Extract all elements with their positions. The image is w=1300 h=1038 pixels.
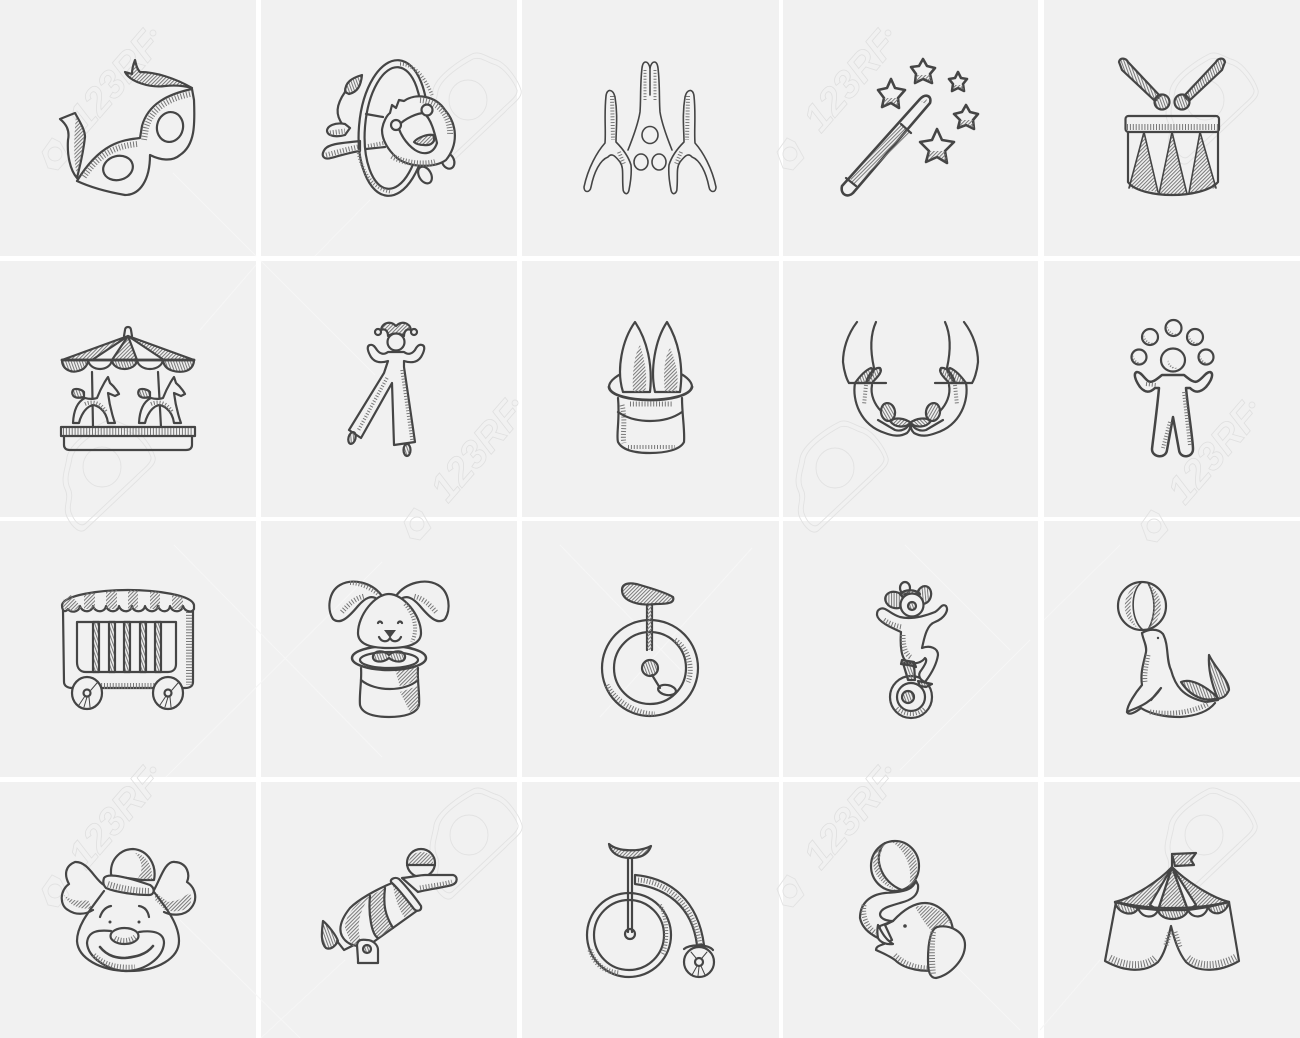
icon: aerial catchers xyxy=(843,322,978,436)
icon: jester on stilts xyxy=(347,323,424,456)
icon: magic wand with stars xyxy=(842,59,978,195)
icon: unicycle xyxy=(602,583,698,716)
icon: rabbit ears in top hat xyxy=(609,322,692,453)
icon: carnival mask xyxy=(60,60,194,195)
icon: penny farthing xyxy=(587,844,714,977)
icon: drum with sticks xyxy=(1119,59,1225,195)
icon: carousel xyxy=(61,327,195,450)
icon: clown on unicycle xyxy=(877,582,947,718)
icon: lion jumping through hoop xyxy=(323,57,457,199)
icon: juggler xyxy=(1132,320,1214,456)
icon: acrobats pyramid xyxy=(584,62,716,194)
icon: clown face xyxy=(62,849,195,971)
icon: seal balancing ball xyxy=(1118,582,1229,717)
icon: circus tent xyxy=(1105,853,1239,970)
icon: rabbit in top hat xyxy=(329,582,449,717)
icon: circus wagon cage xyxy=(62,590,194,709)
icon: human cannon xyxy=(322,849,457,963)
icon: elephant with ball xyxy=(860,841,965,978)
